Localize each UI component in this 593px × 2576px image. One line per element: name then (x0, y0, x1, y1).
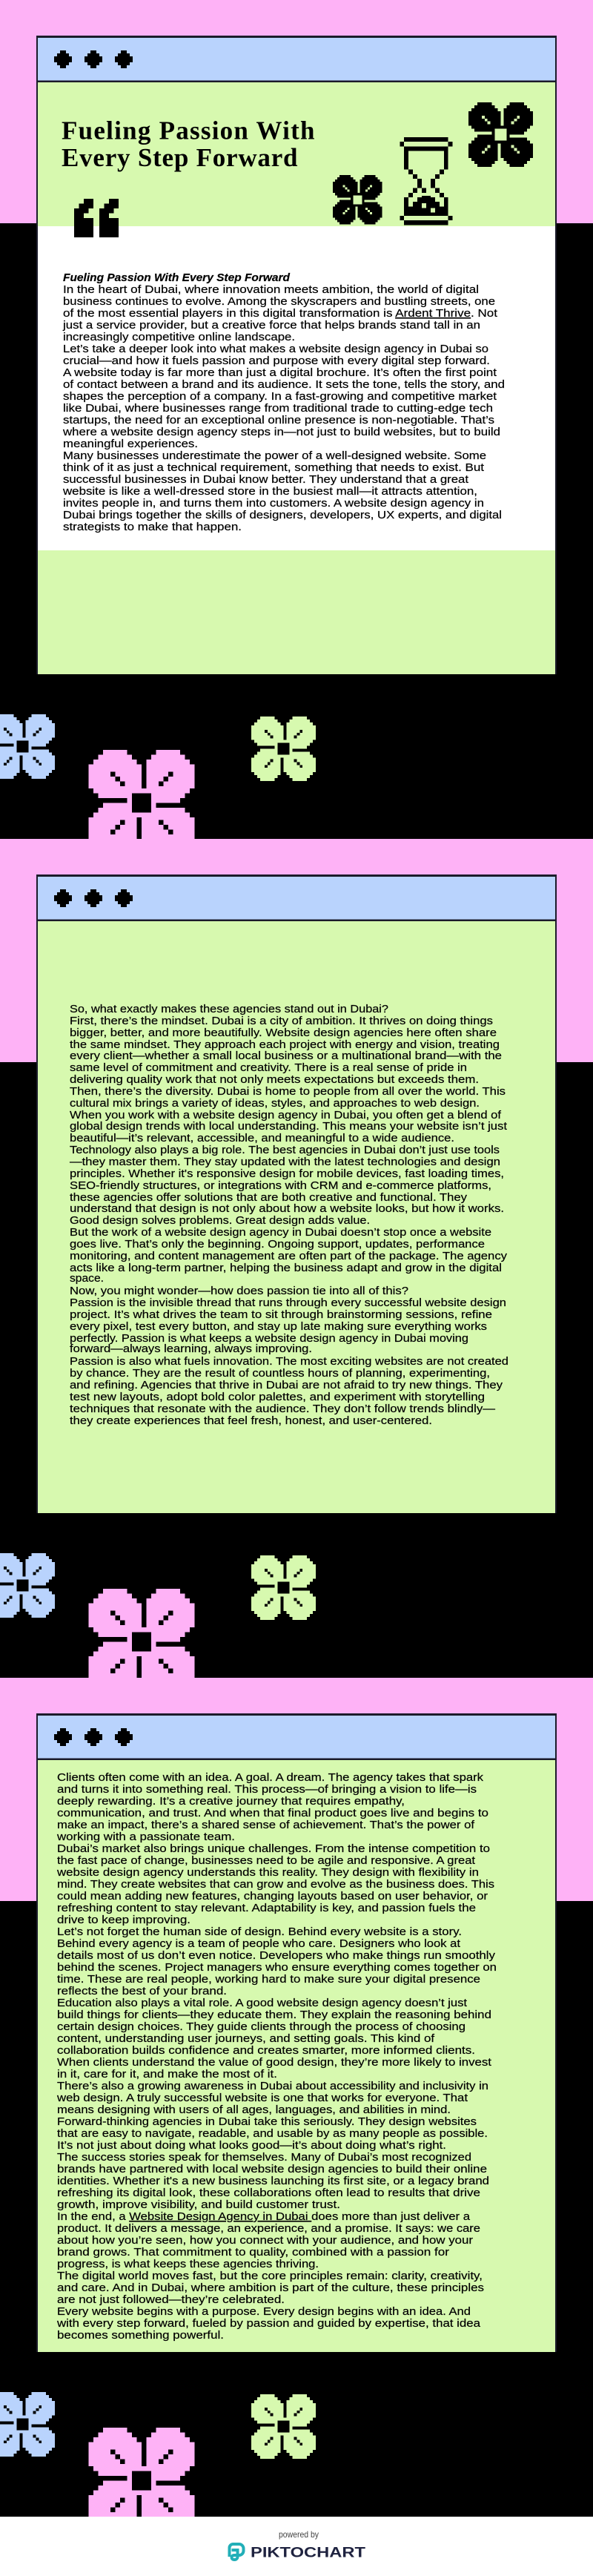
text block: clients, challenges and closing: make an impact, there’s a shared sense of achievement. That’s the power of (57, 1819, 475, 1831)
text block: clients, challenges and closing: behind the scenes. Project managers who ensure everything comes together on (57, 1961, 497, 1974)
white text panel (38, 226, 555, 550)
text block: clients, challenges and closing: details most of us don’t even notice. Developers who make things run smoothly (57, 1949, 496, 1962)
text block: clients, challenges and closing: drive to keep improving. (57, 1914, 191, 1926)
panel: browser window 3 (36, 1713, 557, 2352)
text block: clients, challenges and closing: mind. They create websites that can grow and evolve as the business does. This (57, 1878, 494, 1891)
text block: what makes agencies stand out: project. It’s what drives the team to sit through brainstorming sessions, refine (70, 1308, 492, 1321)
icon: green flower section 3 (251, 2394, 316, 2459)
text block: clients, challenges and closing: about how you’re seen, how you connect with your audience, and how your (57, 2234, 473, 2247)
text block: clients, challenges and closing: There’s also a growing awareness in Dubai about accessibility and inclusivity in (57, 2080, 488, 2092)
text block: introduction: startups, the need for an exceptional online presence is non-negotiable. That’s (63, 414, 494, 426)
icon: pink flower section 2 (89, 1589, 194, 1678)
text block: what makes agencies stand out: cultural mix brings a variety of ideas, styles, and approaches to web design. (70, 1097, 480, 1110)
text block: introduction: website is like a well-dressed store in the busiest mall—it attracts attention, (62, 485, 477, 498)
window 2 title bar (38, 877, 555, 920)
text block: what makes agencies stand out: every pixel, test every button, and stay up late making sure everything works (70, 1320, 487, 1333)
text block: introduction: crucial—and how it fuels passion and purpose with every digital step forward. (63, 355, 490, 367)
text block: what makes agencies stand out: Passion is the invisible thread that runs through every successful website design (70, 1297, 506, 1309)
text block: clients, challenges and closing: that are easy to navigate, readable, and usable by as many people as possible. (57, 2127, 488, 2140)
text block: what makes agencies stand out: But the work of a website design agency in Dubai doesn’t stop once a website (70, 1226, 491, 1239)
text block: what makes agencies stand out: same level of commitment and creativity. There is a real sense of pride in (70, 1061, 467, 1074)
text block: clients, challenges and closing: deeply rewarding. It’s a creative journey that requires empathy, (57, 1795, 405, 1808)
text block: clients, challenges and closing: are not just followed—they’re celebrated. (57, 2293, 285, 2306)
text block: clients, challenges and closing: It’s not just about doing what looks good—it’s about doing what’s right. (57, 2139, 446, 2152)
text: powered by: powered by (279, 2529, 319, 2540)
text block: clients, challenges and closing: progress, is what keeps these agencies thriving. (57, 2258, 319, 2270)
icon: pink flower section 1 (89, 750, 194, 839)
text block: what makes agencies stand out: Now, you might wonder—how does passion tie into all of this? (70, 1285, 408, 1297)
text block: clients, challenges and closing: content, understanding user journeys, and setting goals. This kind of (57, 2032, 435, 2045)
text block: clients, challenges and closing: collaboration builds confidence and creates smarter, more informed clients. (57, 2044, 475, 2057)
text block: introduction: business continues to evolve. Among the skyscrapers and bustling streets, one (63, 295, 495, 308)
icon: green flower section 2 (251, 1555, 316, 1620)
text block: what makes agencies stand out: When you work with a website design agency in Dubai, you often get a blend of (70, 1109, 502, 1121)
text block: what makes agencies stand out: First, there’s the mindset. Dubai is a city of ambition. It thrives on doing things (70, 1015, 493, 1027)
text block: clients, challenges and closing: certain design choices. They guide clients through the process of choosing (57, 2020, 466, 2033)
icon: blue flower section 1 (0, 714, 55, 779)
text block: clients, challenges and closing: Every website begins with a purpose. Every design begins with an idea. And (57, 2305, 471, 2318)
text block: what makes agencies stand out: Good design solves problems. Great design adds value. (70, 1214, 370, 1227)
text block: what makes agencies stand out: SEO-friendly structures, or integrations with CRM and e-commerce platforms, (70, 1179, 491, 1192)
text block: what makes agencies stand out: forward—always learning, always improving. (70, 1343, 312, 1355)
window 1 title bar (38, 38, 555, 80)
title: Fueling Passion With (62, 116, 314, 145)
text block: clients, challenges and closing: in it, care for it, and make the most of it. (57, 2068, 277, 2081)
text block: clients, challenges and closing: Clients often come with an idea. A goal. A dream. The agency takes that spark (57, 1771, 484, 1784)
text block: what makes agencies stand out: by chance. They are the result of countless hours of planning, experimenting, (70, 1367, 490, 1380)
icon: Piktochart logo mark (230, 2544, 243, 2560)
text block: clients, challenges and closing: Forward-thinking agencies in Dubai take this seriously. They design websites (57, 2115, 477, 2128)
text block: introduction: A website today is far more than just a digital brochure. It’s often the first point (63, 366, 497, 379)
text block: what makes agencies stand out: Passion is also what fuels innovation. The most exciting websites are not created (70, 1355, 508, 1368)
text block: what makes agencies stand out: acts like a long-term partner, helping the business adapt and grow in the digital (70, 1262, 502, 1274)
icon: pink flower section 3 (89, 2428, 194, 2517)
panel: browser window 2 (36, 874, 557, 1513)
text block: introduction: invites people in, and turns them into customers. A website design agency in (63, 497, 484, 510)
text block: introduction: Dubai brings together the skills of designers, developers, UX experts, and digital (63, 509, 502, 521)
text block: clients, challenges and closing: time. These are real people, working hard to make sure your digital presence (57, 1973, 480, 1986)
text block: clients, challenges and closing: could mean adding new features, changing layouts based on user behavior, or (57, 1890, 488, 1903)
text block: clients, challenges and closing: brand grows. That commitment to quality, combined with a passion for (57, 2246, 449, 2259)
text block: clients, challenges and closing: communication, and trust. And when that final product goes live and begins to (57, 1807, 488, 1819)
text block: introduction: Fueling Passion With Every Step Forward (63, 271, 291, 284)
text block: clients, challenges and closing: The success stories speak for themselves. Many of Dubai’s most recognized (57, 2151, 471, 2164)
text block: introduction: Many businesses underestimate the power of a well-designed website. Some (63, 449, 486, 462)
text block: clients, challenges and closing: web design. A truly successful website is one that works for everyone. That (56, 2092, 468, 2104)
text block: what makes agencies stand out: understand that design is not only about how a website looks, but how it works. (70, 1202, 504, 1215)
text block: what makes agencies stand out: Then, there’s the diversity. Dubai is home to people from all over the world. This (70, 1085, 506, 1098)
text block: introduction: of contact between a brand and its audience. It sets the tone, tells the story, and (63, 378, 505, 391)
text block: clients, challenges and closing: growth, improve visibility, and build customer trust. (57, 2198, 340, 2211)
text block: clients, challenges and closing: In the end, a Website Design Agency in Dubai does more than just deliver a (57, 2210, 471, 2223)
window 3 body (38, 1760, 555, 2352)
text block: introduction: think of it as just a technical requirement, something that needs to exist. But (63, 461, 485, 474)
panel: browser window 1 (36, 36, 557, 674)
text block: what makes agencies stand out (70, 1003, 508, 1427)
text block: clients, challenges and closing (56, 1771, 497, 2342)
text block: introduction: strategists to make that happen. (63, 521, 242, 533)
window 1 body (38, 82, 555, 674)
text block: what makes agencies stand out: techniques that resonate with the audience. They don’t follow trends blindly— (70, 1403, 495, 1415)
text block: what makes agencies stand out: monitoring, and content management are often part of the package. The agency (70, 1250, 508, 1262)
text block: introduction: like Dubai, where businesses range from traditional trade to cutting-edge tech (63, 402, 493, 415)
text block: introduction: increasingly competitive online landscape. (63, 331, 295, 343)
text block: what makes agencies stand out: space. (70, 1272, 104, 1285)
text block: clients, challenges and closing: Behind every agency is a team of people who care. Designers who look at (57, 1937, 461, 1950)
text block: what makes agencies stand out: delivering quality work that not only meets expectations but exceeds them. (70, 1073, 479, 1086)
icon: hourglass (400, 137, 453, 225)
text block: what makes agencies stand out: global design trends with local understanding. This means your website isn’t just (70, 1120, 508, 1133)
text block: what makes agencies stand out: So, what exactly makes these agencies stand out in Dubai? (70, 1003, 388, 1015)
text block: clients, challenges and closing: refreshing its digital look, these collaborations often lead to results that drive (57, 2187, 480, 2199)
text block: clients, challenges and closing: with every step forward, fueled by passion and guided by expertise, that idea (56, 2317, 481, 2330)
text block: what makes agencies stand out: Technology also plays a big role. The best agencies in Dubai don’t just use tools (70, 1144, 500, 1156)
text block: introduction: meaningful experiences. (63, 438, 198, 450)
text block: what makes agencies stand out: they create experiences that feel fresh, honest, and user-centered. (70, 1414, 432, 1427)
text block: what makes agencies stand out: every client—whether a small local business or a multinational brand—with the (70, 1050, 502, 1062)
title (62, 116, 314, 172)
text block: introduction: where a website design agency steps in—not just to build websites, but to build (62, 426, 500, 438)
text block: clients, challenges and closing: website design agency understands this reality. They design with flexibility in (56, 1866, 479, 1879)
text block: clients, challenges and closing: build things for clients—they educate them. They explain the reasoning behind (57, 2009, 491, 2021)
text block: what makes agencies stand out: —they master them. They stay updated with the latest technologies and design (70, 1156, 500, 1168)
text block: clients, challenges and closing: identities. Whether it's a new business launching its first site, or a legacy brand (57, 2175, 489, 2187)
text block: clients, challenges and closing: reflects the best of your brand. (57, 1985, 227, 1997)
window 3 title bar (38, 1716, 555, 1758)
text block: introduction: successful businesses in Dubai know better. They understand that a great (63, 473, 469, 486)
text block: what makes agencies stand out: perfectly. Passion is what keeps a website design agency in Dubai moving (70, 1332, 468, 1345)
text block: what makes agencies stand out: these agencies offer solutions that are both creative and functional. They (70, 1191, 468, 1204)
text block: clients, challenges and closing: and care. And in Dubai, where ambition is part of the culture, these principles (57, 2282, 484, 2294)
icon: window 1 control dots (54, 50, 133, 68)
icon: blue flower section 3 (0, 2392, 55, 2457)
text block: introduction: shapes the perception of a company. In a fast-growing and competitive market (63, 390, 497, 403)
icon: small black flower (333, 175, 382, 225)
text block: clients, challenges and closing: Let’s not forget the human side of design. Behind every website is a story. (57, 1926, 462, 1938)
text block: clients, challenges and closing: When clients understand the value of good design, they’re more likely to invest (57, 2056, 492, 2069)
text block: what makes agencies stand out: goes live. That’s only the beginning. Ongoing support, updates, performance (70, 1238, 485, 1251)
text block: clients, challenges and closing: means designing with users of all ages, languages, and abilities in mind. (57, 2104, 451, 2116)
icon: blue flower section 2 (0, 1553, 55, 1618)
text block: what makes agencies stand out: bigger, better, and more beautifully. Website design agencies here often share (70, 1027, 497, 1039)
icon: green flower section 1 (251, 717, 316, 781)
text block: what makes agencies stand out: beautiful—it’s relevant, accessible, and meaningful to a wide audience. (70, 1132, 454, 1144)
icon: window 2 control dots (54, 889, 133, 907)
text block: introduction: In the heart of Dubai, where innovation meets ambition, the world of digital (63, 283, 479, 296)
panel: section 3 background (0, 1678, 593, 2517)
text: Piktochart wordmark: PIKTOCHART (251, 2546, 365, 2560)
text block: introduction: Let’s take a deeper look into what makes a website design agency in Dubai so (63, 343, 488, 355)
text block: clients, challenges and closing: the fast pace of change, businesses need to be agile and responsive. A great (57, 1854, 476, 1867)
window 2 body (38, 921, 555, 1513)
text block: clients, challenges and closing: working with a passionate team. (56, 1831, 235, 1843)
panel: section 2 background (0, 839, 593, 1678)
icon: window 3 control dots (54, 1728, 133, 1746)
icon: pixel quotation mark (74, 199, 119, 237)
text block: introduction: just a service provider, but a creative force that helps brands stand tall in an (62, 319, 480, 332)
text block: clients, challenges and closing: becomes something powerful. (57, 2329, 224, 2342)
text block: introduction (62, 271, 505, 533)
text block: clients, challenges and closing: and turns it into something real. This process—of bringing a vision to life—is (57, 1783, 477, 1796)
title: Every Step Forward (62, 143, 298, 172)
panel: section 1 background (0, 0, 593, 839)
text block: clients, challenges and closing: brands have partnered with local website design agencies to build their online (57, 2163, 487, 2175)
icon: large black flower (468, 102, 533, 167)
text block: clients, challenges and closing: Education also plays a vital role. A good website design agency doesn’t just (57, 1997, 468, 2009)
panel: footer (0, 2517, 593, 2576)
text block: what makes agencies stand out: principles. Whether it's responsive design for mobile devices, fast loading times, (70, 1167, 504, 1180)
text block: what makes agencies stand out: the same mindset. They approach each project with energy and vision, treating (70, 1038, 500, 1051)
text block: clients, challenges and closing: Dubai’s market also brings unique challenges. From the intense competition to (57, 1842, 490, 1855)
text block: clients, challenges and closing: refreshing content to stay relevant. Adaptability is key, and passion fuels the (57, 1902, 476, 1914)
text block: what makes agencies stand out: and refining. Agencies that thrive in Dubai are not afraid to try new things. They (70, 1379, 503, 1391)
text block: clients, challenges and closing: The digital world moves fast, but the core principles remain: clarity, creativity, (57, 2270, 483, 2282)
text block: what makes agencies stand out: test new layouts, adopt bold color palettes, and experiment with storytelling (70, 1391, 485, 1403)
text block: clients, challenges and closing: product. It delivers a message, an experience, and a promise. It says: we care (57, 2222, 480, 2235)
text block: introduction: of the most essential players in this digital transformation is Ardent Thrive . Not (63, 307, 498, 320)
